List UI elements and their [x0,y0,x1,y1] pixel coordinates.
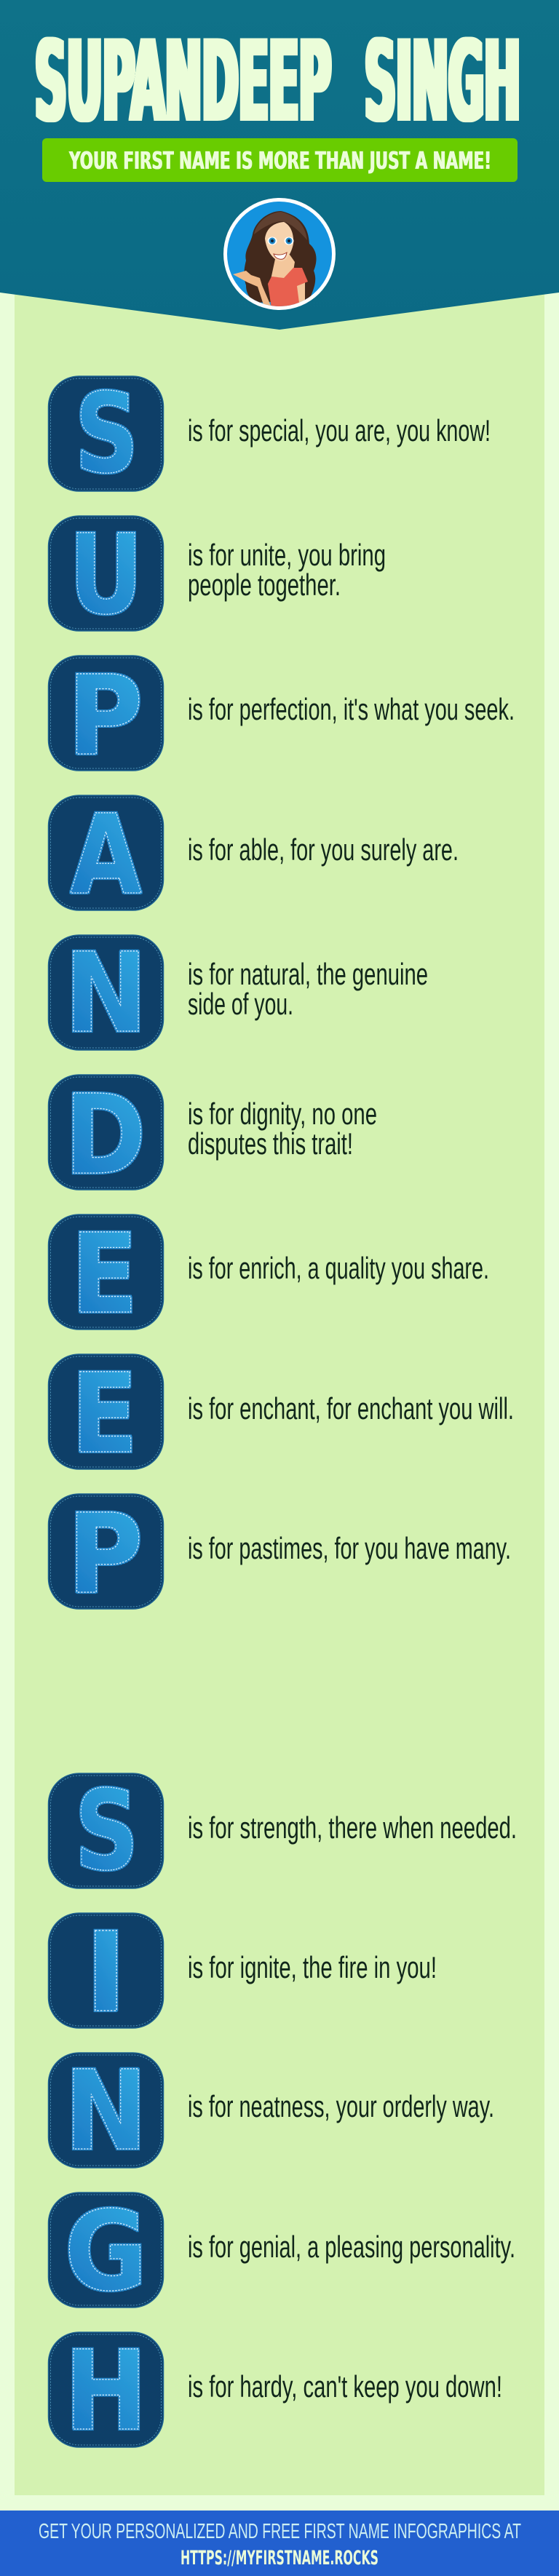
letter tile P: P [67,652,143,780]
caption: is for natural, the genuine [188,957,428,991]
letter tile G: G [64,2187,147,2315]
letter tile P: P [67,1490,143,1618]
letter tile H: H [64,2327,147,2455]
caption: is for unite, you bring [188,538,386,572]
letter tile E: E [71,1210,138,1338]
footer url: HTTPS://MYFIRSTNAME.ROCKS [181,2547,378,2569]
row: D dignity [48,1071,377,1199]
caption: is for ignite, the fire in you! [188,1950,437,1984]
row: E enchant [48,1350,514,1478]
letter tile U: U [68,511,143,639]
caption [188,1097,377,1161]
caption [188,538,386,602]
footer [0,2511,559,2576]
row: G genial [48,2187,515,2315]
subtitle bar [42,138,518,182]
letter tile N: N [64,929,147,1057]
caption: is for dignity, no one [188,1097,377,1131]
row: U unite [48,511,386,639]
row: H hardy [48,2327,502,2455]
caption: people together. [188,568,341,602]
letter tile I [48,1909,163,2037]
row: S strength [48,1767,517,1895]
caption: side of you. [188,987,293,1021]
row: N neatness [48,2047,494,2175]
letter tile S: S [74,1767,138,1895]
row: N natural [48,929,428,1057]
row: P perfection [48,652,515,780]
row: E enrich [48,1210,489,1338]
letter tile S: S [74,370,138,498]
letter tile S [48,370,163,498]
letter tile S [48,1767,163,1895]
letter tile E [48,1210,163,1338]
header banner [0,0,559,330]
caption: disputes this trait! [188,1126,353,1161]
row: I ignite [48,1909,437,2037]
letter tile E [48,1350,163,1478]
letter tile I: I [84,1909,127,2037]
row: S special [48,370,491,498]
letter tile A: A [70,791,142,919]
caption [188,957,428,1021]
icon: woman avatar [223,198,336,310]
letter tile E: E [71,1350,138,1478]
row: P pastimes [48,1490,511,1618]
row: A able [48,791,459,919]
letter tile D: D [64,1071,146,1199]
letter tile N: N [64,2047,147,2175]
